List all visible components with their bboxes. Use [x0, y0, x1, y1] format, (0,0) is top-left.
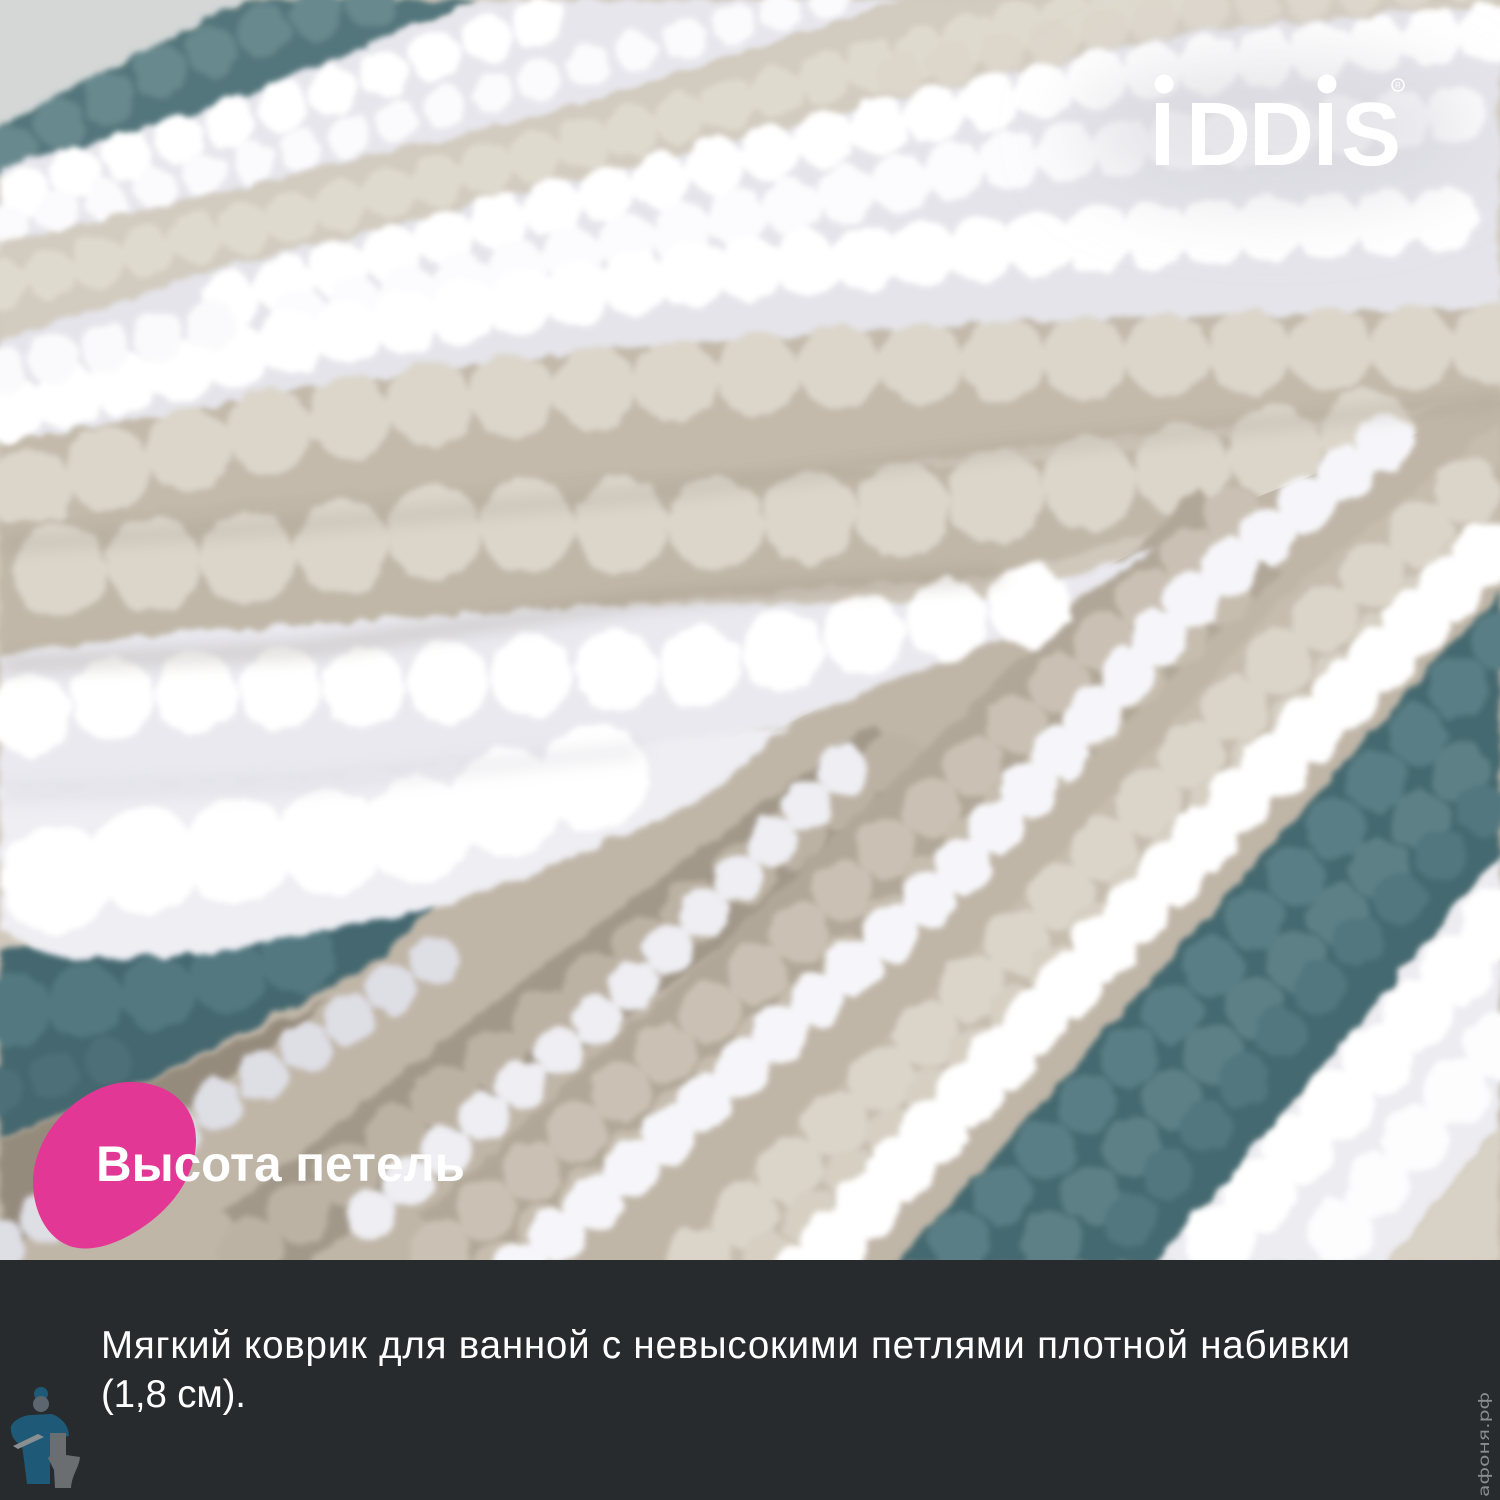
- stripe: beige far left: [0, 1000, 330, 1260]
- stripe: fan white 2: [520, 430, 1400, 1270]
- stripe: top teal band: [0, 0, 480, 175]
- logo: iddis: R: [1395, 81, 1401, 90]
- watermark: афоня.рф: [1475, 1392, 1493, 1497]
- stripe: fan white 3: [800, 540, 1500, 1280]
- soft shading over roll seams: [0, 400, 1500, 795]
- fold: white upper roll: [0, 545, 1160, 800]
- stripe: gray backdrop corner: [0, 0, 250, 130]
- fold: lower beige roll: [0, 395, 1500, 665]
- stripe: fan beige 2: [440, 510, 1260, 1270]
- pink blob: [33, 1082, 196, 1248]
- logo backdrop shading: [1075, 60, 1475, 200]
- fold: upper beige roll: [0, 308, 1500, 545]
- stripe: bottom right white band: [1155, 855, 1500, 1265]
- stripe: fan beige 3: [660, 420, 1500, 1270]
- stripe: top beige band: [0, 0, 1500, 340]
- stripe: fan beige 1: [250, 760, 900, 1250]
- stripe: lower-left teal band: [0, 890, 450, 1140]
- stripe: fan teal band: [895, 590, 1500, 1265]
- fan stripes: base: [0, 400, 1500, 1260]
- logo: iddis: IDDIS: [1150, 85, 1401, 185]
- stripe: thin white left: [0, 945, 460, 1245]
- fold: white lower roll: [0, 725, 790, 960]
- description text: Мягкий коврик для ванной с невысокими петлями плотной набивки: [101, 1324, 1350, 1367]
- stripe: wide white band: [0, 5, 1500, 445]
- heading: Высота петель: [96, 1136, 465, 1192]
- stripe: bottom right beige corner: [1385, 1125, 1500, 1265]
- description text: (1,8 см).: [101, 1373, 246, 1416]
- stripe: top white band: [0, 0, 910, 255]
- stripe: fan white 1: [370, 740, 870, 1215]
- icon: plumber with toilet: [11, 1387, 80, 1488]
- bottom dark panel: [0, 1260, 1500, 1500]
